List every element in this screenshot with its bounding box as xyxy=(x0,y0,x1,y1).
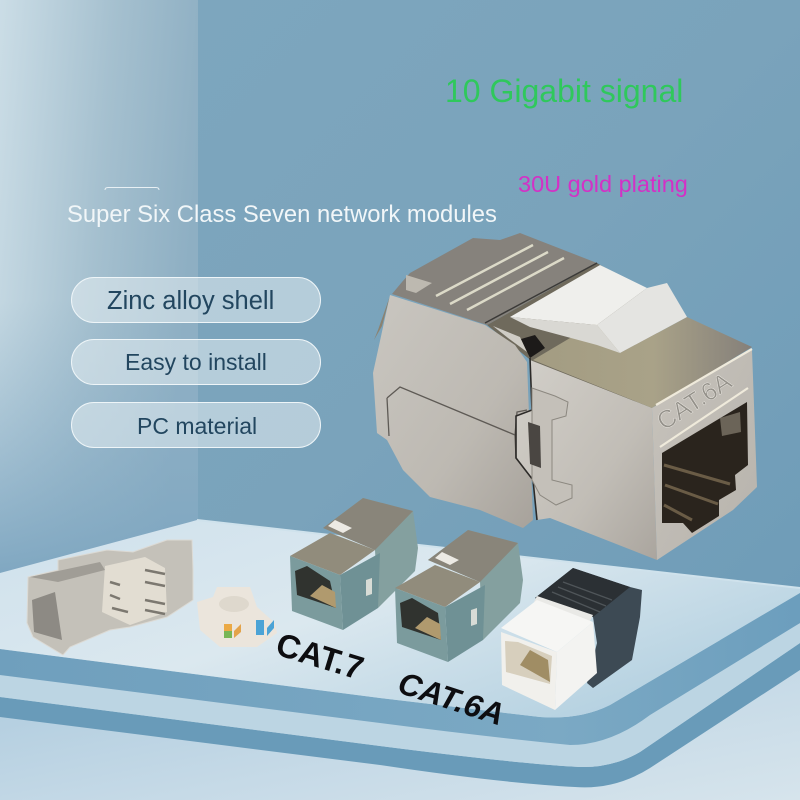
pill: Zinc alloy shell: Zinc alloy shell xyxy=(107,287,274,315)
metal inner cavity xyxy=(32,592,62,640)
white keystone module with black rear xyxy=(501,568,642,710)
cream terminal block xyxy=(102,557,167,625)
backing under latch xyxy=(487,263,660,408)
CAT.7 shielded module xyxy=(290,498,418,630)
side seams xyxy=(387,387,533,478)
RJ45 opening xyxy=(662,402,748,533)
pill: Easy to install xyxy=(72,340,320,384)
label: CAT.7: CAT.7 xyxy=(272,625,368,687)
label: CAT.6A: CAT.6A xyxy=(394,664,509,732)
dark notch xyxy=(521,335,545,358)
title: 10 Gigabit signal: 10 Gigabit signal xyxy=(445,73,683,109)
white latch tab xyxy=(510,265,687,353)
terminal slots xyxy=(110,570,165,614)
rear clip xyxy=(374,296,390,340)
left side panel xyxy=(373,295,533,528)
cap collar xyxy=(219,596,249,612)
white terminal cap xyxy=(197,587,277,647)
roof xyxy=(533,317,752,408)
panel seam xyxy=(516,358,537,520)
pill: PC material xyxy=(72,402,320,448)
metal cover plate xyxy=(30,562,105,582)
colour-coded terminals xyxy=(224,620,274,638)
heading: product name: Super Six Class Seven network modules xyxy=(67,201,497,228)
disassembled shielded module xyxy=(27,540,193,655)
pill: Easy to install: Easy to install xyxy=(125,349,267,375)
front rails xyxy=(656,349,752,447)
front embossed CAT.6A: CAT.6A xyxy=(652,367,737,436)
pill: PC material: PC material xyxy=(137,413,257,439)
right side panel xyxy=(516,360,657,560)
CAT.6A shielded module xyxy=(395,530,523,662)
side latch xyxy=(528,388,572,505)
front face xyxy=(652,350,757,560)
label: 30U gold plating: 30U gold plating xyxy=(518,171,688,197)
decorative tab above heading xyxy=(105,188,159,190)
top shell with ridges xyxy=(392,233,597,352)
stepped platform xyxy=(0,520,800,800)
pill: Zinc alloy shell xyxy=(72,278,320,322)
main CAT.6A shielded module xyxy=(373,233,757,560)
